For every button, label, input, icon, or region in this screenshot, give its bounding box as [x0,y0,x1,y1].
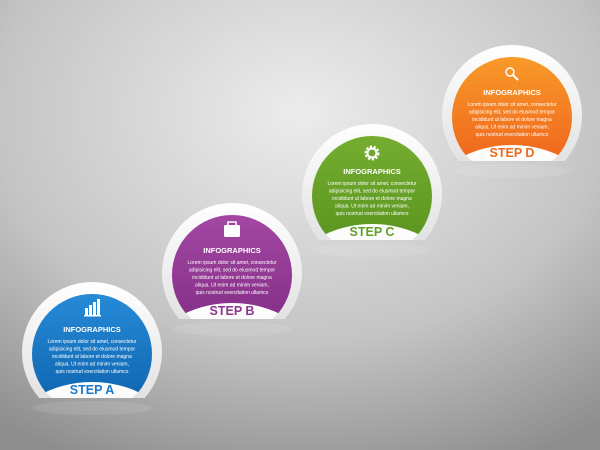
text block: adipisicing elit, sed do eiusmod tempor [469,110,555,116]
card: step D [442,45,582,161]
step label: STEP A [70,383,114,397]
step label: STEP B [210,304,254,318]
text block: incididunt ut labore et dolore magna [472,117,552,123]
step label: STEP D [490,146,534,160]
text block [48,339,137,375]
card: step C [302,124,442,240]
text block: adipisicing elit, sed do eiusmod tempor [49,346,135,352]
text block: aliqua. Ut enim ad minim veniam, [55,362,129,368]
icon: gear [366,147,378,159]
text block: incididunt ut labore et dolore magna [192,275,272,281]
card: step A [22,282,162,415]
text block: Lorem ipsum dolor sit amet, consectetur [468,102,557,108]
text block: quis nostrud exercitation ullamco [56,369,129,375]
icon: briefcase [224,222,240,237]
heading: INFOGRAPHICS [203,246,261,255]
text block [188,260,277,296]
text block: aliqua. Ut enim ad minim veniam, [335,204,409,210]
text block: adipisicing elit, sed do eiusmod tempor [189,268,275,274]
text block [328,181,417,217]
heading: INFOGRAPHICS [343,167,401,176]
text block: incididunt ut labore et dolore magna [332,196,412,202]
text block: adipisicing elit, sed do eiusmod tempor [329,188,415,194]
heading: INFOGRAPHICS [63,325,121,334]
text block: aliqua. Ut enim ad minim veniam, [195,282,269,288]
text block: incididunt ut labore et dolore magna [52,354,132,360]
text block: Lorem ipsum dolor sit amet, consectetur [328,181,417,187]
text block: aliqua. Ut enim ad minim veniam, [475,124,549,130]
icon: magnifier [506,68,518,80]
step label: STEP C [350,225,394,239]
card: step B [162,203,302,319]
icon: bar chart [84,299,101,316]
text block [468,102,557,138]
text block: Lorem ipsum dolor sit amet, consectetur [188,260,277,266]
text block: Lorem ipsum dolor sit amet, consectetur [48,339,137,345]
text block: quis nostrud exercitation ullamco [336,211,409,217]
text block: quis nostrud exercitation ullamco [476,132,549,138]
text block: quis nostrud exercitation ullamco [196,290,269,296]
heading: INFOGRAPHICS [483,88,541,97]
